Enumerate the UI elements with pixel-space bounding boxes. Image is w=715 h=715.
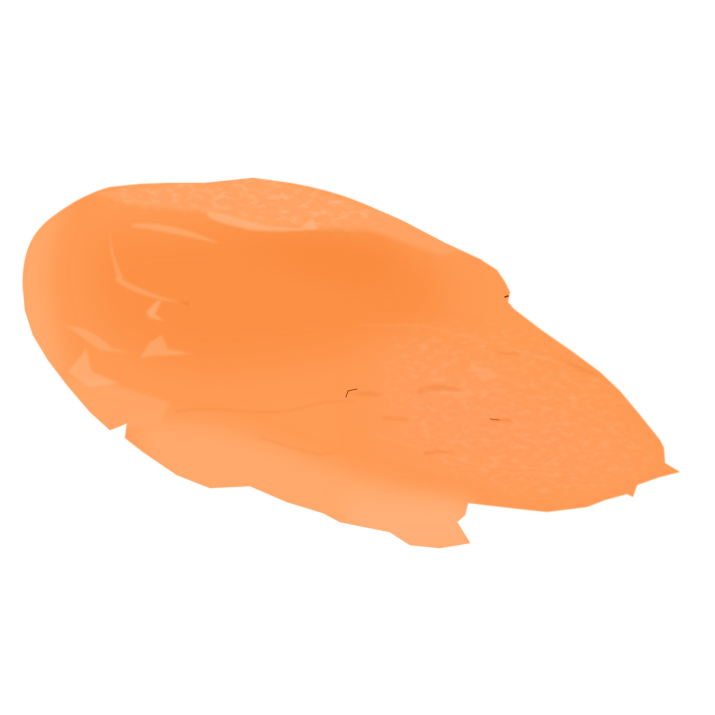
cream body [10,172,680,555]
bottom tab [350,496,470,548]
lower band [125,420,480,555]
illustration: orange cream smear [22,177,680,549]
tonal shading [10,172,665,555]
upper dark fold [283,234,388,270]
surface grain: right lobe [396,330,649,493]
surface grain: top band [120,179,382,232]
shadow creases [178,301,600,456]
ridges and flakes [68,211,594,455]
right lobe [392,367,644,500]
left rim [22,207,67,382]
small dark specks [346,296,508,420]
central deep orange [90,226,451,371]
lower fold line [175,401,355,455]
light flakes [67,211,500,396]
long faint ridges [360,325,650,470]
lower-left lip [64,379,168,430]
top band [92,172,470,255]
